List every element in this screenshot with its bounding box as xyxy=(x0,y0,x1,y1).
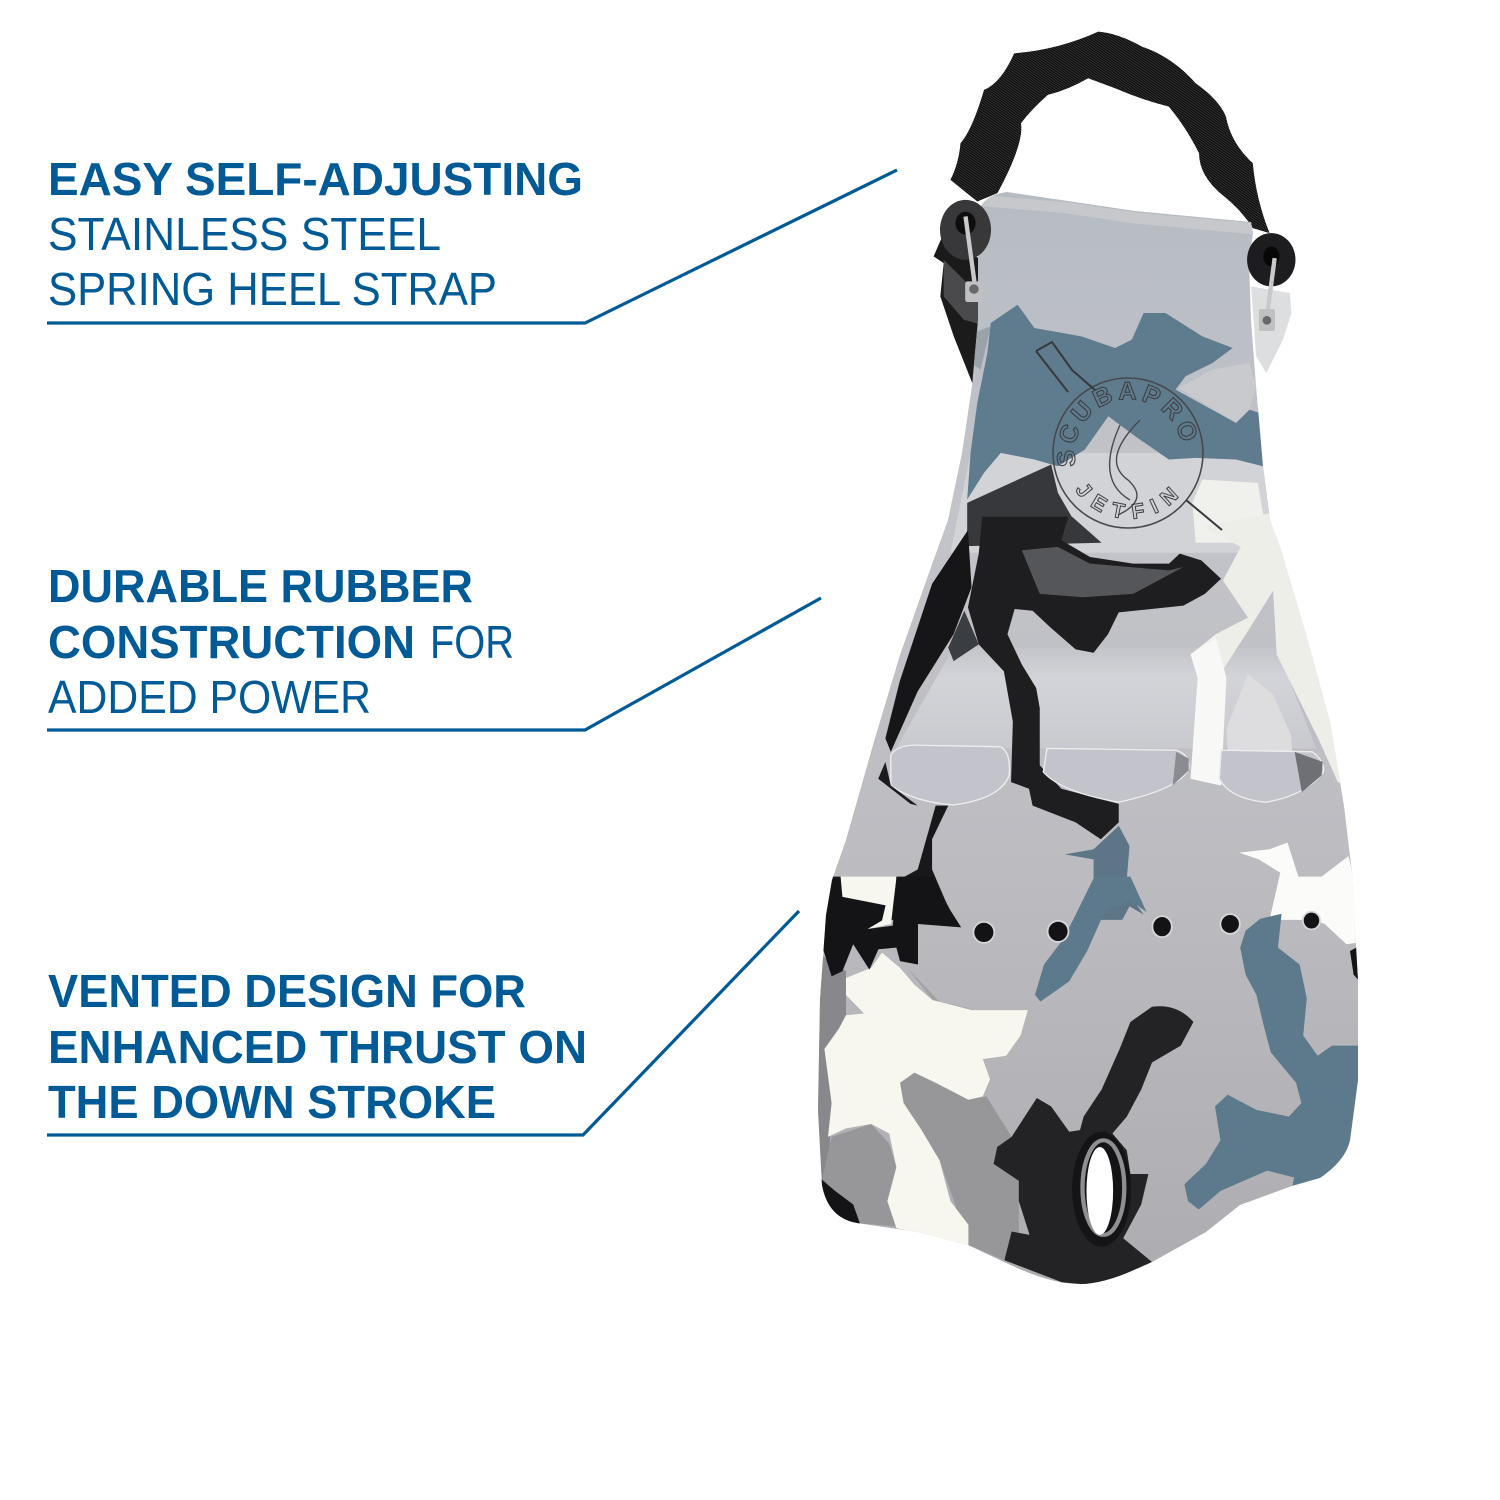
heading: durable rubber: DURABLE RUBBER xyxy=(48,560,473,612)
toe eyelet xyxy=(1072,1132,1131,1247)
central black xyxy=(994,1006,1193,1286)
left black strip xyxy=(885,530,972,752)
lower camo xyxy=(810,877,1372,1286)
black leg below window xyxy=(891,806,954,920)
blue patch below window xyxy=(1065,826,1144,920)
callout: heel strap xyxy=(47,153,897,323)
leader line: vented design xyxy=(47,911,799,1135)
heel strap webbing xyxy=(950,32,1270,233)
callout: rubber construction xyxy=(47,560,821,730)
text: added power: ADDED POWER xyxy=(48,671,371,723)
pocket rim xyxy=(975,200,1255,229)
white patch xyxy=(824,953,1028,1247)
white right patch xyxy=(1239,843,1363,920)
heading: enhanced thrust on: ENHANCED THRUST ON xyxy=(48,1021,587,1073)
upper-right white xyxy=(1270,876,1356,944)
middle camo xyxy=(878,513,1363,920)
camo pattern xyxy=(810,200,1372,1286)
center blue xyxy=(1035,877,1147,1002)
callout: vented design xyxy=(47,911,799,1135)
vent windows xyxy=(891,745,1010,805)
mid-grey patches xyxy=(908,970,974,1010)
right white wash xyxy=(1191,513,1352,789)
text: stainless steel: STAINLESS STEEL xyxy=(48,208,441,260)
upper-left black xyxy=(823,877,961,976)
upper camo: blue-grey xyxy=(950,305,1273,553)
leader line: rubber construction xyxy=(47,598,821,730)
right blue xyxy=(1184,914,1364,1210)
right washer and spring xyxy=(1247,233,1295,331)
heading: the down stroke: THE DOWN STROKE xyxy=(48,1076,496,1128)
text: for: FOR xyxy=(430,616,514,668)
strap hardware xyxy=(940,200,1295,331)
upper-left white xyxy=(839,877,896,929)
fin back side strap mount xyxy=(934,233,1291,390)
heading: construction: CONSTRUCTION xyxy=(48,616,415,668)
left washer and spring xyxy=(940,200,991,302)
black streak xyxy=(968,517,1221,839)
infographic canvas xyxy=(47,32,1358,1284)
heading: easy self-adjusting: EASY SELF-ADJUSTING xyxy=(48,153,583,205)
logo: scubapro jetfin emblem: JETFIN xyxy=(1076,484,1179,520)
logo: scubapro jetfin emblem: SCUBAPRO xyxy=(1056,382,1196,466)
logo: scubapro jetfin emblem xyxy=(1035,340,1223,531)
text: spring heel strap: SPRING HEEL STRAP xyxy=(48,263,497,315)
right black spot xyxy=(1350,948,1358,980)
vent holes xyxy=(973,912,1320,943)
heading: vented design for: VENTED DESIGN FOR xyxy=(48,965,526,1017)
leader line: heel strap xyxy=(47,170,897,323)
product: camo jet fin xyxy=(818,32,1358,1284)
left edge shadow xyxy=(818,956,846,1184)
interior bridge highlight xyxy=(896,648,1316,748)
fin body xyxy=(818,192,1358,1284)
bottom-left black xyxy=(822,1180,860,1224)
